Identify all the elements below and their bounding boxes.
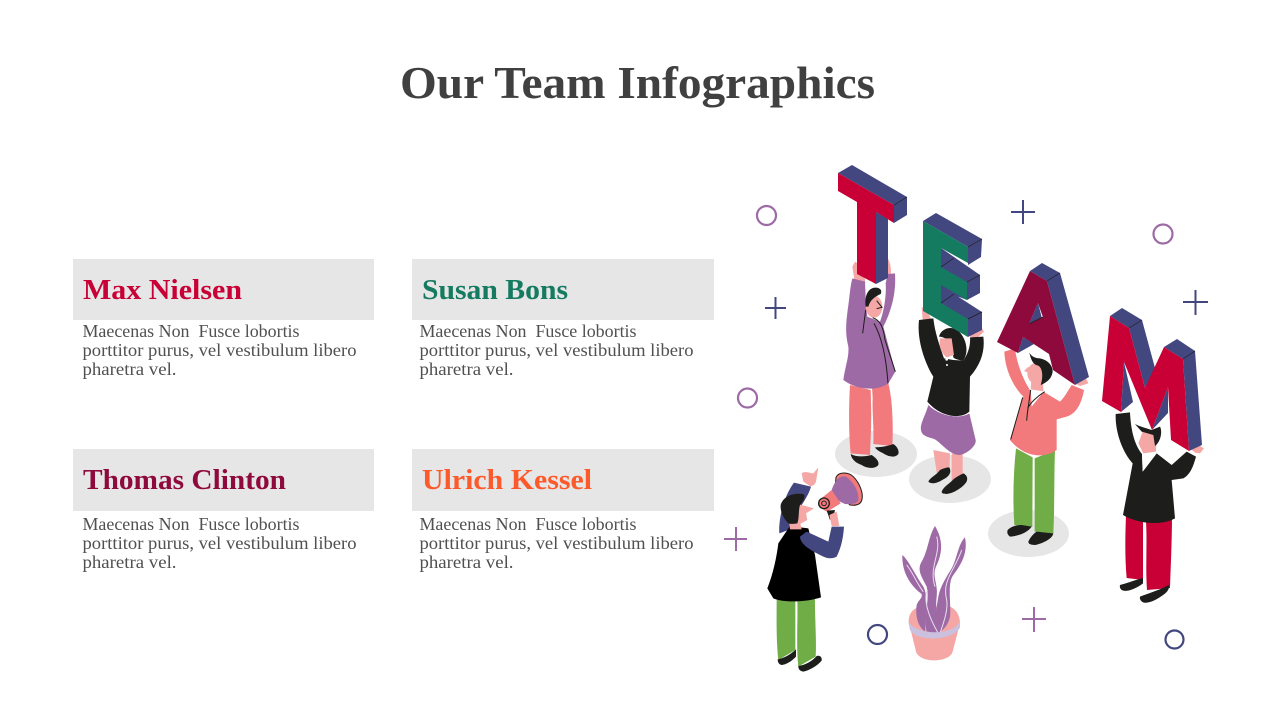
name header: Ulrich Kessel: [412, 449, 714, 511]
name header: Susan Bons: Susan Bons: [422, 274, 568, 306]
description: Ulrich Kessel: porttitor purus, vel vestibulum libero: [420, 533, 694, 553]
person: black suit and red trousers holding M: [1116, 412, 1204, 603]
description: Susan Bons: porttitor purus, vel vestibulum libero: [420, 340, 694, 360]
name header: Ulrich Kessel: Ulrich Kessel: [422, 464, 592, 496]
floor shadows: [835, 431, 1069, 557]
person: salmon shirt holding A: [1004, 348, 1088, 545]
person: black top and purple skirt holding E: [919, 307, 984, 494]
team illustration: [724, 165, 1208, 672]
letter A: [997, 263, 1089, 385]
description: Ulrich Kessel: pharetra vel.: [420, 552, 514, 572]
letter E: [923, 213, 982, 337]
icon: megaphone: [819, 473, 862, 526]
panel: Max Nielsen: [73, 259, 374, 379]
title: Our Team Infographics: [400, 57, 875, 108]
description: Thomas Clinton: Maecenas Non Fusce lobortis: [82, 514, 300, 534]
description: Max Nielsen: porttitor purus, vel vestibulum libero: [82, 340, 356, 360]
name header: Susan Bons: [412, 259, 714, 320]
description: Max Nielsen: Maecenas Non Fusce lobortis: [82, 321, 300, 341]
description: Susan Bons: pharetra vel.: [420, 359, 514, 379]
name header: Thomas Clinton: Thomas Clinton: [83, 464, 286, 496]
decorative plus signs: [724, 200, 1208, 632]
description: Susan Bons: Maecenas Non Fusce lobortis: [420, 321, 636, 341]
decorative circles: [738, 206, 1184, 648]
description: Thomas Clinton: pharetra vel.: [82, 552, 176, 572]
person: purple sweater holding T: [843, 256, 899, 468]
description: Ulrich Kessel: [420, 514, 694, 572]
name header: Thomas Clinton: [73, 449, 374, 511]
description: Max Nielsen: pharetra vel.: [82, 359, 176, 379]
panel: Ulrich Kessel: [412, 449, 714, 572]
description: Susan Bons: [420, 321, 694, 379]
panel: Susan Bons: [412, 259, 714, 379]
name header: Max Nielsen: [73, 259, 374, 320]
description: Ulrich Kessel: Maecenas Non Fusce lobortis: [420, 514, 636, 534]
icon: potted plant: [902, 526, 966, 660]
panel: Thomas Clinton: [73, 449, 374, 572]
description: Thomas Clinton: [82, 514, 356, 572]
description: Max Nielsen: [82, 321, 356, 379]
description: Thomas Clinton: porttitor purus, vel vestibulum libero: [82, 533, 356, 553]
letter T: [838, 165, 907, 284]
person: with megaphone: [767, 467, 862, 672]
letter M: [1102, 308, 1202, 451]
name header: Max Nielsen: Max Nielsen: [83, 274, 242, 306]
